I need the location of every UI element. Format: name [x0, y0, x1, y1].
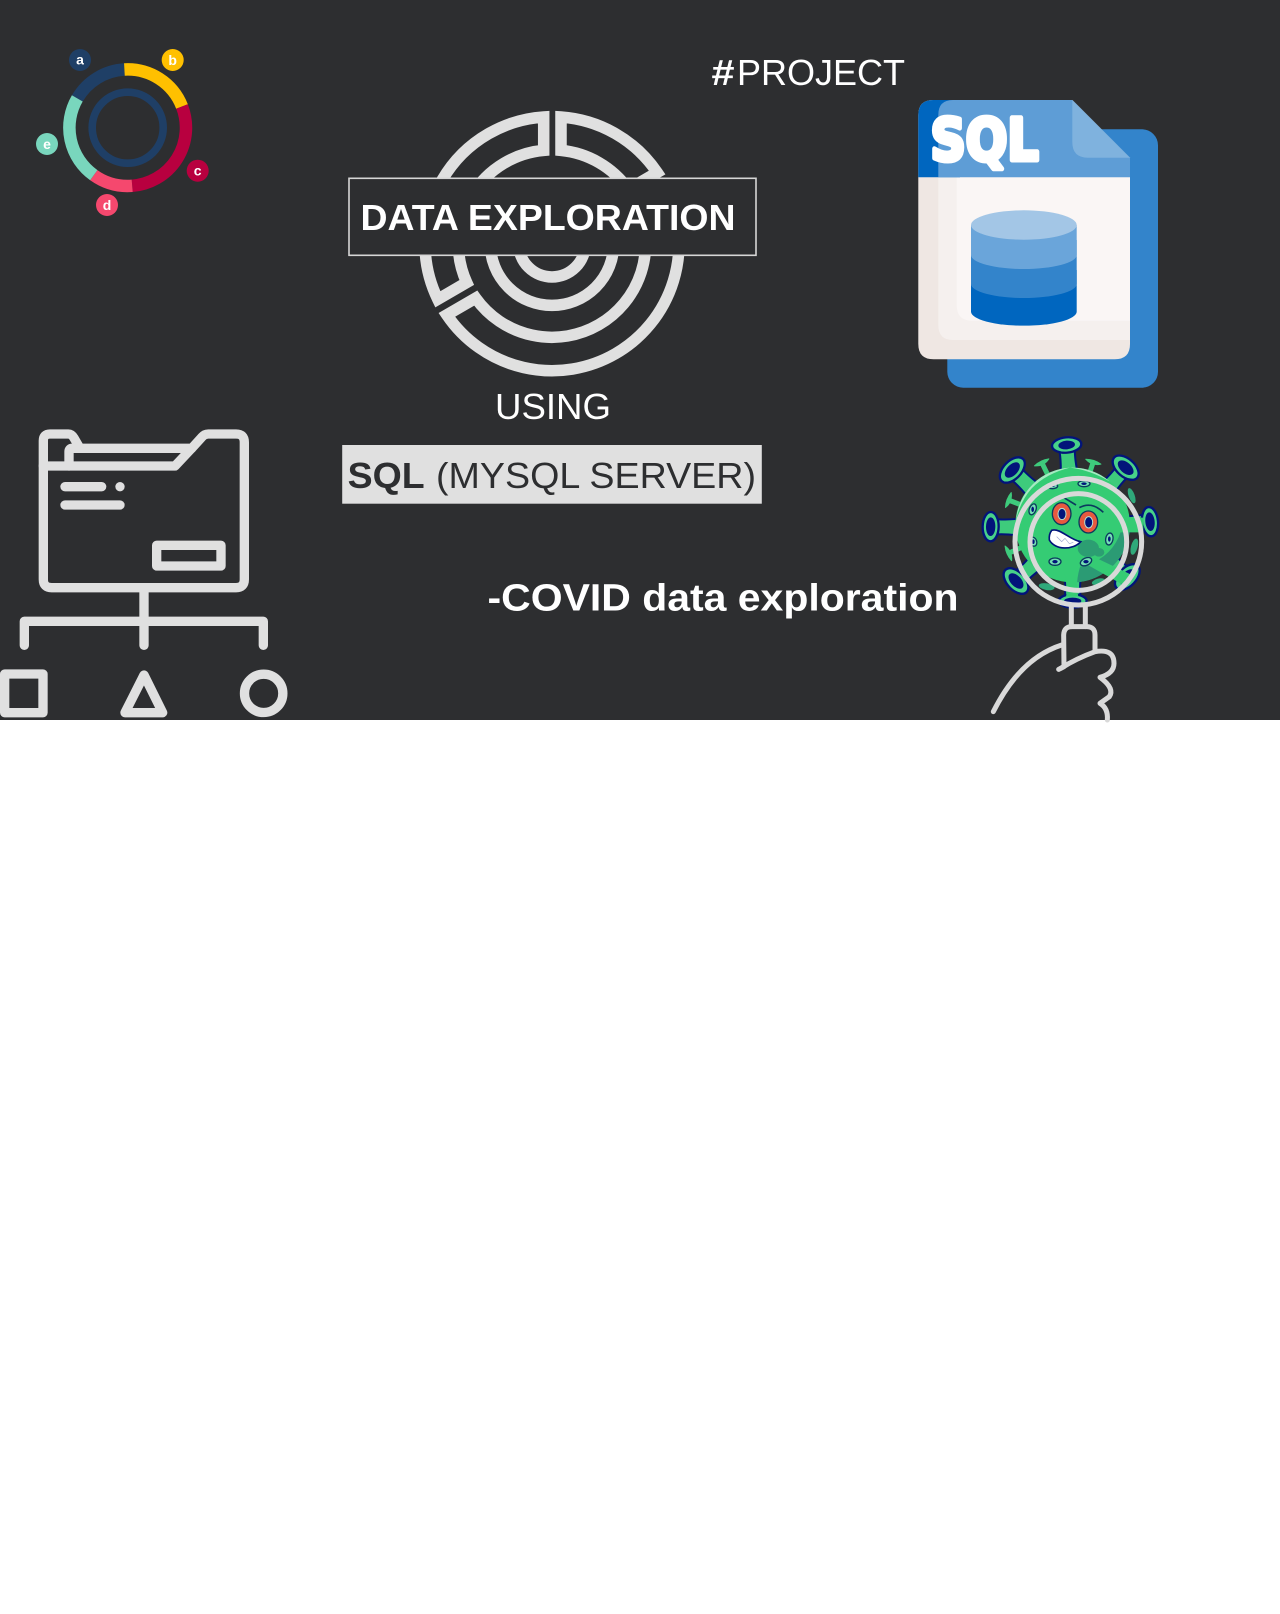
- icon: virus under magnifying glass held by hand: [982, 436, 1159, 720]
- heading: #PROJECT: PROJECT: [737, 52, 905, 93]
- icon: donut chart with labelled segments: a: [76, 52, 84, 68]
- icon: SQL database file: [918, 100, 1158, 388]
- icon: donut chart with labelled segments: [36, 49, 209, 216]
- body shadow: [1075, 525, 1130, 582]
- label box: SQL (MYSQL SERVER): SQL: [348, 455, 425, 496]
- magnifier and hand outline: [993, 478, 1142, 720]
- title box: DATA EXPLORATION: [349, 178, 756, 255]
- small leaf spikes: [1004, 458, 1140, 591]
- dark banner background: [0, 0, 1280, 720]
- heading: #PROJECT: #: [712, 52, 734, 93]
- icon: donut chart with labelled segments: b: [168, 52, 177, 68]
- icon: donut chart with labelled segments: d: [103, 197, 111, 213]
- title box: DATA EXPLORATION: DATA EXPLORATION: [360, 197, 736, 238]
- body highlight: [1016, 468, 1070, 520]
- icon: donut chart with labelled segments: c: [194, 162, 202, 178]
- mask spots: [1078, 540, 1099, 557]
- subtitle: COVID data exploration: -COVID data exploration: [488, 578, 958, 620]
- eyes: [1052, 498, 1103, 533]
- small spots: [1028, 481, 1114, 568]
- icon: concentric target rings: [425, 117, 679, 371]
- icon: database cylinder: [971, 210, 1077, 326]
- label box: SQL (MYSQL SERVER): [342, 445, 762, 504]
- icon: folder hierarchy: [5, 434, 283, 713]
- icon: donut chart with labelled segments: e: [43, 136, 51, 152]
- virus body: [1015, 468, 1130, 582]
- text: USING: USING: [495, 386, 611, 427]
- large spikes with caps: [982, 436, 1159, 608]
- arms over shadow: [1060, 518, 1143, 597]
- mouth: [1049, 530, 1081, 548]
- label box: SQL (MYSQL SERVER): (MYSQL SERVER): [436, 455, 756, 496]
- icon: SQL database file: SQL: [930, 106, 1038, 174]
